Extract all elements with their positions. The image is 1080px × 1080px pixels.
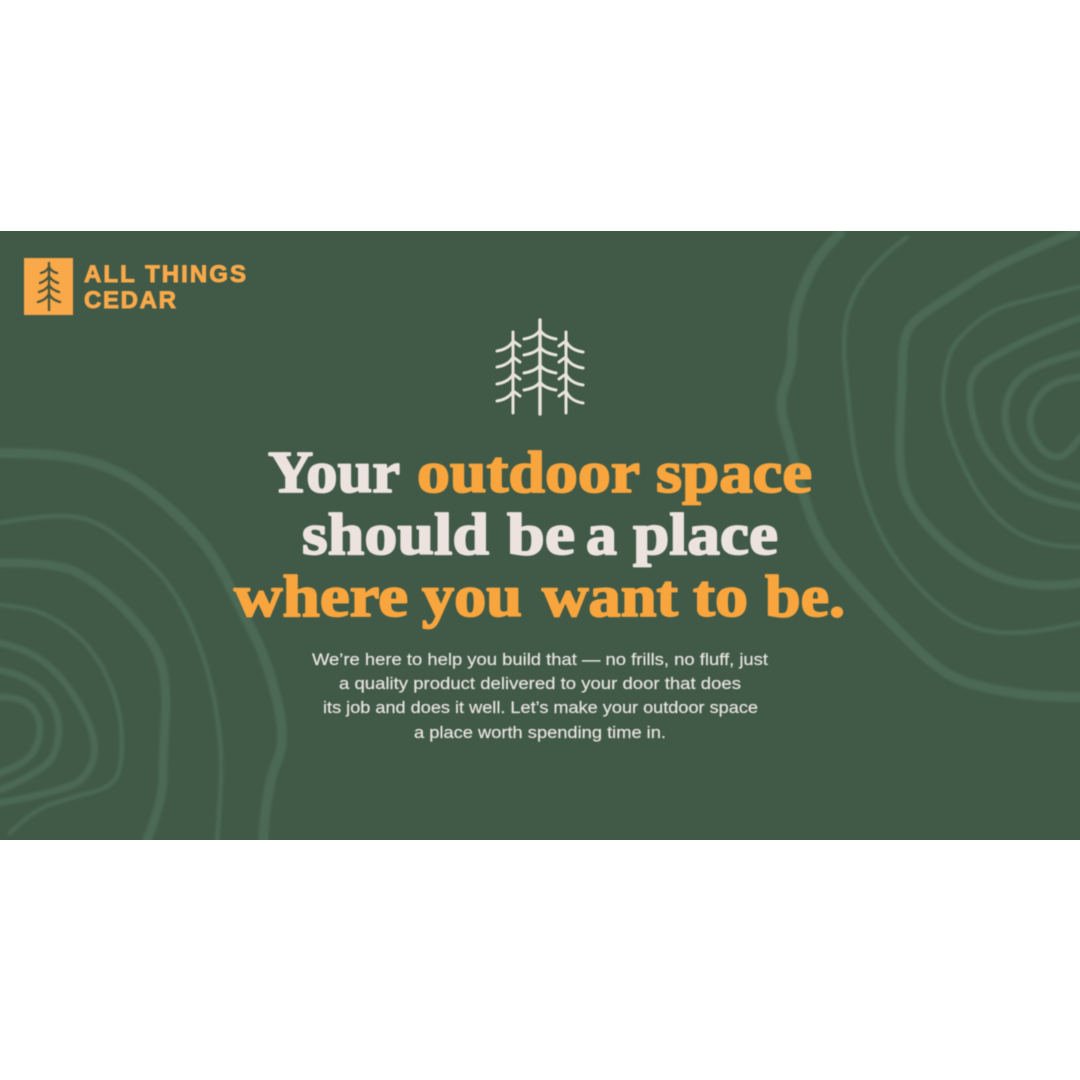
body text: its job and does it well. Let’s make your outdoor space	[323, 698, 758, 717]
body text: a place worth spending time in.	[414, 723, 666, 742]
tree rings: bottom left	[0, 453, 282, 840]
heading: you	[422, 563, 522, 629]
heading: a	[586, 501, 617, 567]
heading: Your	[268, 439, 400, 505]
logo wordmark: ALL THINGS	[84, 261, 246, 288]
tree rings: top right	[781, 232, 1080, 697]
heading: place	[633, 501, 778, 567]
icon: logo square with tree	[24, 258, 73, 315]
logo wordmark: CEDAR	[84, 287, 176, 314]
heading: where	[234, 563, 408, 629]
panel: green banner	[0, 231, 1080, 840]
logo: All Things Cedar	[24, 258, 246, 315]
heading	[234, 439, 845, 629]
heading: to	[693, 563, 748, 629]
heading: should	[302, 501, 489, 567]
body text	[312, 650, 768, 742]
heading: space	[656, 439, 812, 505]
logo wordmark	[84, 261, 246, 314]
body text: a quality product delivered to your door that does	[339, 674, 741, 693]
icon: three cedar trees	[497, 320, 583, 414]
body text: We’re here to help you build that — no frills, no fluff, just	[312, 650, 768, 669]
heading: be	[507, 501, 575, 567]
heading: be.	[765, 563, 845, 629]
heading: outdoor	[417, 439, 640, 505]
heading: want	[542, 563, 678, 629]
